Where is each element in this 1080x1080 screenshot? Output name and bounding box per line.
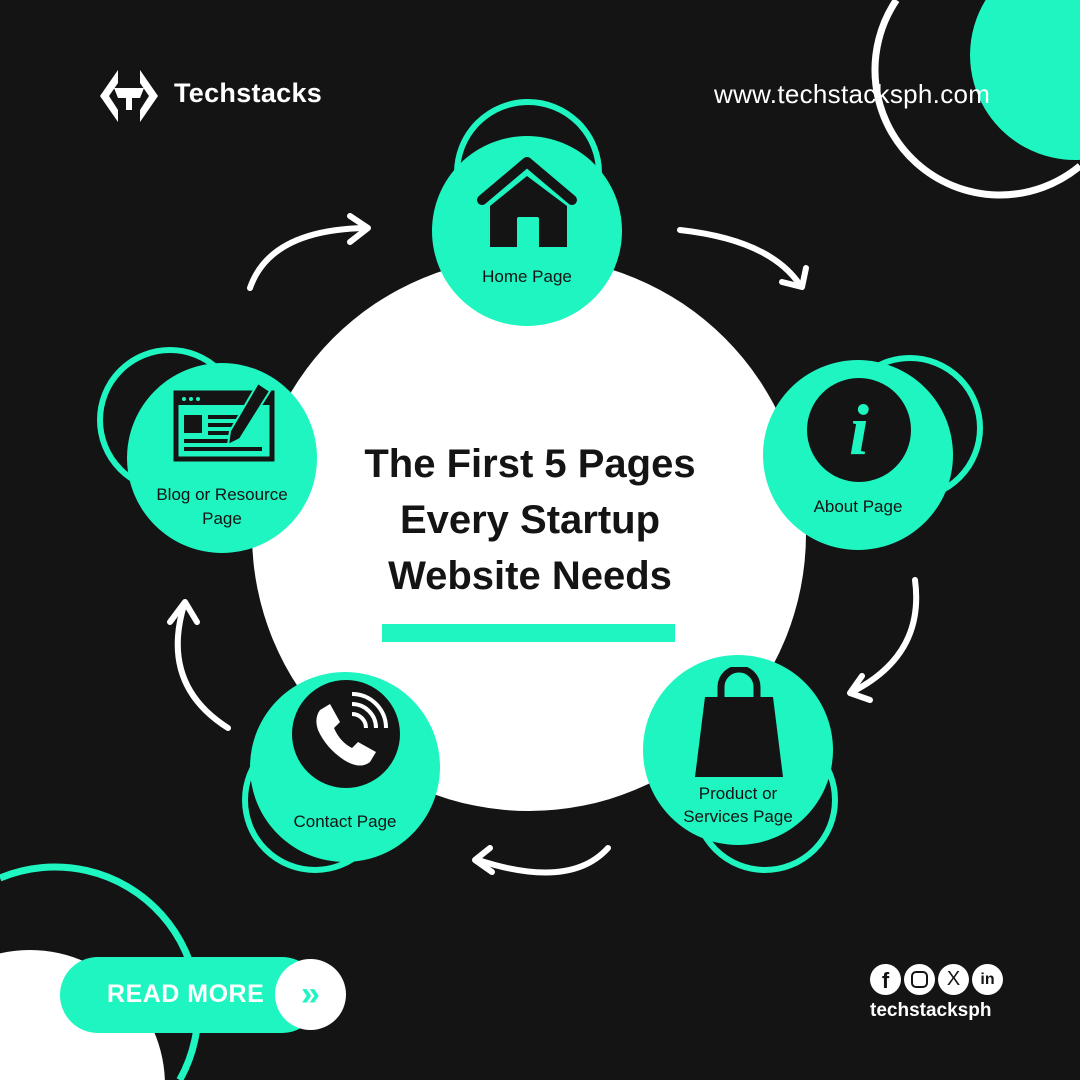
arrows bbox=[170, 216, 916, 872]
node: Home Page: Home Page bbox=[482, 267, 572, 286]
title underline bbox=[382, 624, 675, 642]
node: About Page bbox=[763, 360, 953, 550]
icon: house bbox=[477, 157, 577, 247]
node: Home Page bbox=[432, 136, 622, 326]
title bbox=[364, 442, 696, 598]
button: read more: READ MORE bbox=[107, 980, 264, 1008]
social icons: techstacksph bbox=[870, 1000, 991, 1021]
node: Blog or Resource Page: Blog or Resource bbox=[156, 485, 288, 504]
social icons bbox=[870, 964, 1003, 1021]
button: read more bbox=[60, 957, 346, 1033]
node: Product or Services Page: Product or bbox=[699, 784, 777, 803]
icon: info bbox=[807, 378, 911, 482]
title: Website Needs bbox=[388, 554, 672, 598]
button: read more: » bbox=[301, 975, 320, 1013]
node: Product or Services Page bbox=[643, 655, 833, 845]
icon: phone bbox=[292, 680, 400, 788]
node: Blog or Resource Page: Page bbox=[202, 509, 242, 528]
node: Blog or Resource Page bbox=[127, 363, 317, 553]
social icons: in bbox=[980, 971, 995, 988]
icon: blog window bbox=[174, 384, 274, 462]
website url: www.techstacksph.com bbox=[714, 79, 990, 109]
decoration: bottom-left circles bbox=[0, 867, 198, 1080]
logo: Techstacks bbox=[174, 78, 322, 108]
logo bbox=[100, 70, 322, 122]
title: Every Startup bbox=[400, 498, 660, 542]
social icons: X bbox=[947, 968, 960, 990]
node: Product or Services Page: Services Page bbox=[683, 807, 793, 826]
node outline rings bbox=[100, 102, 980, 870]
decoration: top-right circles bbox=[875, 0, 1080, 195]
icon: info: i bbox=[849, 390, 869, 470]
node: Contact Page: Contact Page bbox=[293, 812, 396, 831]
central white circle bbox=[252, 257, 806, 811]
node: Contact Page bbox=[250, 672, 440, 862]
social icons: f bbox=[882, 968, 889, 993]
node: About Page: About Page bbox=[814, 497, 902, 516]
title: The First 5 Pages bbox=[364, 442, 696, 486]
icon: shopping bag bbox=[695, 667, 783, 777]
